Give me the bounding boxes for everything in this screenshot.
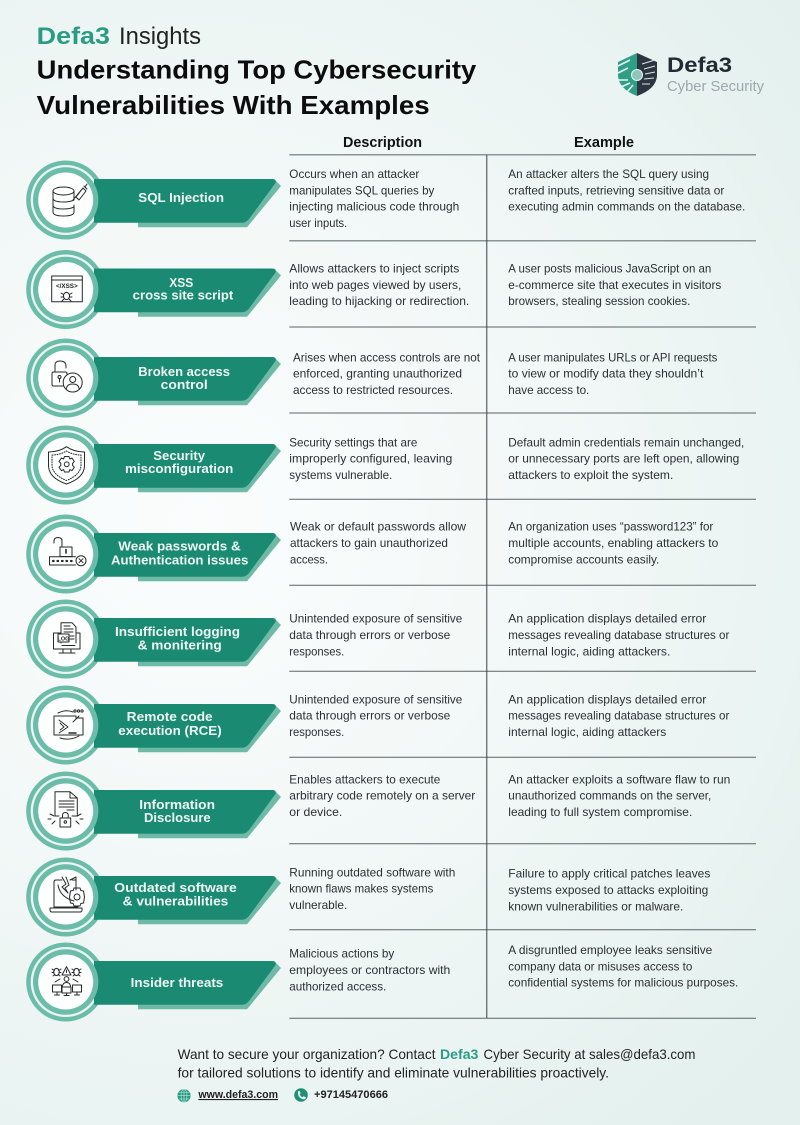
label: Outdated software <box>114 880 237 895</box>
label: Security <box>153 448 206 463</box>
label <box>115 624 240 652</box>
contact: phone <box>294 1088 388 1102</box>
row 3 description: Arises when access controls are not <box>293 350 481 364</box>
label: Insider threats <box>131 975 223 990</box>
row 7 example <box>508 692 729 739</box>
brand line: Defa3 Insights <box>37 23 201 50</box>
footer call to action: Cyber Security at sales@defa3.com <box>484 1046 696 1062</box>
row 2 example: browsers, stealing session cookies. <box>508 294 690 308</box>
label: Insufficient logging <box>115 624 240 639</box>
label <box>111 538 248 568</box>
footer call to action <box>178 1046 696 1081</box>
row 10 description <box>289 947 450 993</box>
category: Security misconfiguration <box>26 426 281 504</box>
row 4 example: attackers to exploit the system. <box>508 468 673 482</box>
row 10 example <box>508 943 738 990</box>
label: & vulnerabilities <box>123 894 228 908</box>
label: Authentication issues <box>111 552 248 568</box>
row 6 description <box>289 612 463 658</box>
row 6 example: messages revealing database structures or <box>508 628 729 642</box>
row 6 example <box>508 612 729 658</box>
category: XSS cross site script <box>26 250 281 329</box>
row 7 example: internal logic, aiding attackers <box>508 725 666 739</box>
row 2 description: leading to hijacking or redirection. <box>289 294 469 308</box>
label: Remote code <box>127 709 213 724</box>
row 8 description: Enables attackers to execute <box>289 772 441 786</box>
icon: shield with gear <box>48 447 84 484</box>
row 8 description: or device. <box>289 805 342 819</box>
row 3 description <box>293 350 481 397</box>
row 9 description: known flaws makes systems <box>289 882 433 896</box>
row 8 description: arbitrary code remotely on a server <box>289 789 475 803</box>
row 6 description: data through errors or verbose <box>289 628 451 642</box>
row 8 example: An attacker exploits a software flaw to run <box>508 772 730 786</box>
row 5 description: Weak or default passwords allow <box>290 520 466 534</box>
label: misconfiguration <box>125 461 233 476</box>
footer call to action: Want to secure your organization? Contact <box>178 1046 436 1062</box>
row 6 example: internal logic, aiding attackers. <box>508 644 670 658</box>
row 10 description: Malicious actions by <box>289 947 394 961</box>
label: Weak passwords & <box>118 538 241 554</box>
row 3 description: access to restricted resources. <box>293 383 453 397</box>
row 10 description: authorized access. <box>289 979 386 993</box>
label <box>118 709 222 738</box>
main heading <box>37 54 477 120</box>
icon: code window with bug: </XSS> <box>56 283 78 290</box>
row 5 description: access. <box>290 552 328 566</box>
row 6 description: Unintended exposure of sensitive <box>289 612 463 626</box>
category: SQL Injection <box>26 160 281 240</box>
row 7 description: Unintended exposure of sensitive <box>289 692 463 706</box>
row 2 example: A user posts malicious JavaScript on an <box>508 262 711 276</box>
category: Outdated software and vulnerabilities <box>26 858 281 936</box>
label: & monitering <box>138 638 222 652</box>
row 1 example: crafted inputs, retrieving sensitive data or <box>508 183 724 197</box>
icon: bugs, warning, person and computers <box>52 967 82 996</box>
logo: Defa3 Cyber Security: Defa3 <box>667 54 732 77</box>
row 5 example <box>508 520 719 566</box>
category: Information Disclosure <box>26 772 281 850</box>
row 2 description <box>289 262 469 308</box>
row 3 example: have access to. <box>508 383 589 397</box>
category: Insufficient logging and monitering <box>26 600 281 678</box>
row 5 example: An organization uses “password123” for <box>508 520 713 534</box>
brand line: Defa3 Insights: Insights <box>119 23 201 50</box>
row 9 example: known vulnerabilities or malware. <box>508 899 683 913</box>
column heading: Description: Description <box>343 135 422 151</box>
row 4 description: Security settings that are <box>289 435 418 449</box>
row 4 description <box>289 435 452 482</box>
header title block <box>37 23 477 120</box>
icon: terminal window <box>54 710 83 739</box>
row 2 description: Allows attackers to inject scripts <box>289 262 459 276</box>
row 5 example: compromise accounts easily. <box>508 552 659 566</box>
icon: open lock and password field <box>50 538 86 566</box>
row 4 description: improperly configured, leaving <box>289 452 452 466</box>
icon: phone <box>294 1088 308 1102</box>
row 4 example: Default admin credentials remain unchanged, <box>508 435 744 449</box>
row 3 example: to view or modify data they shouldn’t <box>508 367 704 381</box>
footer call to action: for tailored solutions to identify and eliminate vulnerabilities proactively. <box>178 1065 609 1081</box>
row 8 description <box>289 772 475 819</box>
table grid <box>289 155 756 1018</box>
row 3 description: enforced, granting unauthorized <box>293 367 462 381</box>
logo: Defa3 Cyber Security: Cyber Security <box>667 78 764 95</box>
row 1 description: user inputs. <box>289 216 347 230</box>
icon: log file on monitor: LOG <box>58 636 69 642</box>
main heading: Vulnerabilities With Examples <box>37 90 430 120</box>
contact: phone: +97145470666 <box>314 1089 388 1101</box>
row 6 example: An application displays detailed error <box>508 612 706 626</box>
row 8 example: unauthorized commands on the server, <box>508 789 711 803</box>
category: Insider threats <box>26 942 281 1022</box>
icon: globe <box>177 1089 191 1102</box>
label: Information <box>139 797 215 812</box>
contact: website: www.defa3.com <box>197 1089 278 1101</box>
row 9 description: vulnerable. <box>289 898 347 912</box>
row 10 example: company data or misuses access to <box>508 959 693 973</box>
label: XSS <box>169 275 194 290</box>
row 8 example <box>508 772 730 819</box>
row 1 description: injecting malicious code through <box>289 200 459 214</box>
label <box>138 364 230 392</box>
row 2 example <box>508 262 721 308</box>
row 4 description: systems vulnerable. <box>289 468 392 482</box>
row 1 description <box>289 167 459 230</box>
row 10 example: confidential systems for malicious purposes. <box>508 976 738 990</box>
row 2 description: into web pages viewed by users, <box>289 278 461 292</box>
row 9 description: Running outdated software with <box>289 865 455 879</box>
label: cross site script <box>133 288 234 302</box>
icon: open lock and user <box>52 361 82 392</box>
row 3 example: A user manipulates URLs or API requests <box>508 350 717 364</box>
footer call to action: Defa3 <box>440 1046 479 1062</box>
icon: log file on monitor <box>54 623 80 653</box>
row 6 description: responses. <box>289 644 344 658</box>
label <box>139 797 215 825</box>
row 4 example: or unnecessary ports are left open, allowing <box>508 452 739 466</box>
icon: laptop with crack and gear <box>50 877 84 912</box>
label: SQL Injection <box>138 190 224 205</box>
label <box>114 880 237 908</box>
main heading: Understanding Top Cybersecurity <box>37 54 477 84</box>
label: Broken access <box>138 364 230 379</box>
category: Weak passwords and Authentication issues <box>26 514 281 594</box>
label <box>133 275 234 302</box>
contact: website <box>177 1089 278 1102</box>
row 10 description: employees or contractors with <box>289 963 450 977</box>
row 1 example: executing admin commands on the database. <box>508 200 745 214</box>
row 9 example <box>508 867 710 913</box>
icon: database and syringe <box>53 184 87 216</box>
logo: Defa3 Cyber Security <box>618 53 764 96</box>
icon: shield <box>618 53 657 96</box>
row 7 example: An application displays detailed error <box>508 692 706 706</box>
row 5 description <box>290 520 466 566</box>
row 7 description: data through errors or verbose <box>289 709 451 723</box>
row 9 example: systems exposed to attacks exploiting <box>508 883 708 897</box>
row 5 example: multiple accounts, enabling attackers to <box>508 536 719 550</box>
row 2 example: e-commerce site that executes in visitors <box>508 278 721 292</box>
icon: document with padlock <box>48 792 83 827</box>
category: Broken access control <box>26 338 281 418</box>
row 5 description: attackers to gain unauthorized <box>290 536 448 550</box>
label: control <box>161 377 208 392</box>
row 7 description <box>289 692 463 739</box>
label: execution (RCE) <box>118 723 222 738</box>
label <box>125 448 233 476</box>
brand line: Defa3 Insights: Defa3 <box>37 23 110 50</box>
icon: code window with bug <box>52 276 82 302</box>
row 1 description: Occurs when an attacker <box>289 167 419 181</box>
row 4 example <box>508 435 744 482</box>
label: Disclosure <box>144 810 211 825</box>
row 1 description: manipulates SQL queries by <box>289 183 434 197</box>
category: Remote code execution (RCE) <box>26 686 281 764</box>
row 8 example: leading to full system compromise. <box>508 805 692 819</box>
column heading: Example: Example <box>574 135 634 151</box>
row 7 description: responses. <box>289 725 344 739</box>
row 1 example <box>508 167 745 214</box>
row 9 description <box>289 865 455 912</box>
row 1 example: An attacker alters the SQL query using <box>508 167 709 181</box>
row 9 example: Failure to apply critical patches leaves <box>508 867 710 881</box>
row 10 example: A disgruntled employee leaks sensitive <box>508 943 713 957</box>
row 3 example <box>508 350 717 397</box>
row 7 example: messages revealing database structures or <box>508 709 729 723</box>
